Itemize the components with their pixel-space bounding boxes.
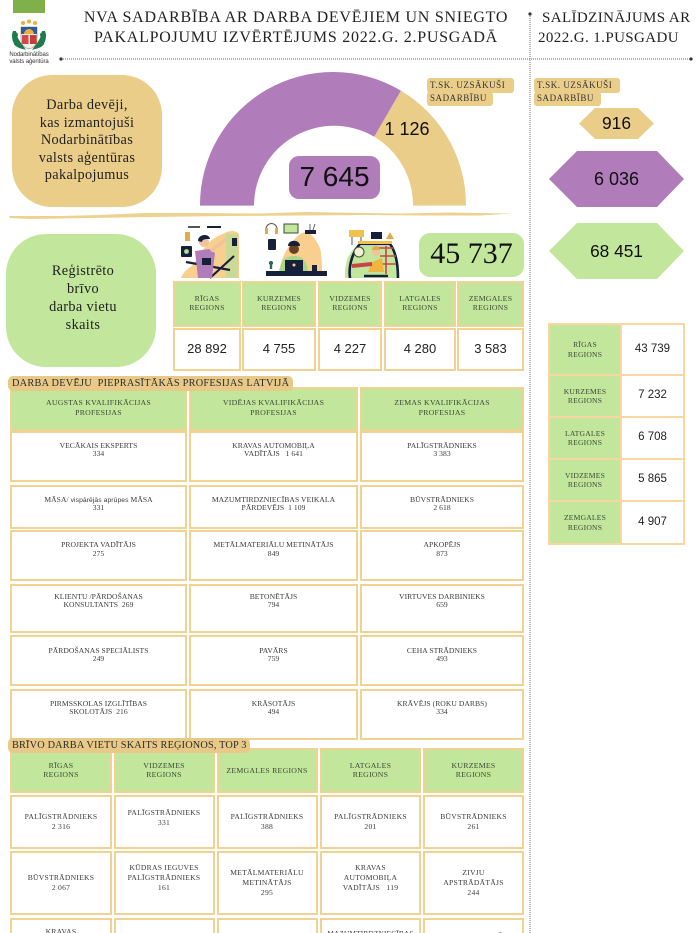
table: most demanded professions: MĀSA/ vispārējās aprūpes MĀSA xyxy=(44,495,153,504)
table: vacancies by region: ZEMGALES xyxy=(469,294,512,302)
table: most demanded professions: VIDĒJAS KVALIFIKĀCIJAS xyxy=(223,398,324,407)
panel: total vacancies 45 737 xyxy=(419,233,524,277)
table: top 3 vacancies by region: METĀLMATERIĀLU xyxy=(230,868,304,877)
table: first half comparison by region: RĪGAS xyxy=(573,340,597,349)
table: first half comparison by region: REGIONS xyxy=(568,480,602,489)
table: top 3 vacancies by region: ZEMGALES REGIONS xyxy=(226,766,308,774)
table: first half comparison by region: 5 865 xyxy=(638,473,667,485)
table: most demanded professions: PROJEKTA VADĪTĀJS xyxy=(61,540,136,549)
table: vacancies by region: REGIONS xyxy=(332,303,368,312)
hexagon 916: 916 xyxy=(602,113,631,133)
table: first half comparison by region: 4 907 xyxy=(638,516,667,528)
table: most demanded professions: PIRMSSKOLAS IZGLĪTĪBAS xyxy=(50,699,147,708)
table: vacancies by region: REGIONS xyxy=(473,303,508,312)
table: vacancies by region: VIDZEMES xyxy=(329,294,371,302)
table: top 3 vacancies by region: PALĪGSTRĀDNIEKS xyxy=(25,812,97,821)
tag: started cooperation: SADARBĪBU xyxy=(430,93,487,103)
table: most demanded professions: 849 xyxy=(268,549,279,558)
table: top 3 vacancies by region: 2 316 xyxy=(52,822,70,831)
table: first half comparison by region: KURZEMES xyxy=(564,387,606,396)
table: vacancies by region: 3 583 xyxy=(474,341,507,356)
logo: Nodarbinātības valsts aģentūra: valsts aģentūra xyxy=(9,59,49,65)
gauge value 1 126: 1 126 xyxy=(384,119,430,139)
table: vacancies by region xyxy=(173,281,524,371)
table: most demanded professions: VADĪTĀJS 1 641 xyxy=(244,449,303,458)
table: most demanded professions: 659 xyxy=(436,600,448,609)
table: most demanded professions: BŪVSTRĀDNIEKS xyxy=(410,495,474,504)
table: most demanded professions: 494 xyxy=(268,707,279,716)
hexagon 68 451 xyxy=(549,223,684,279)
table: top 3 vacancies by region: REGIONS xyxy=(353,770,388,779)
table: most demanded professions: 334 xyxy=(93,449,104,458)
table: most demanded professions: PALĪGSTRĀDNIEKS xyxy=(407,441,477,450)
panel: vacancies label: brīvo xyxy=(67,281,99,297)
table: top 3 vacancies by region: PALĪGSTRĀDNIEKS xyxy=(334,812,407,821)
table: most demanded professions: 249 xyxy=(93,654,104,663)
section heading: top 3 vacancies: BRĪVO DARBA VIETU SKAITS REĢIONOS, TOP 3 xyxy=(12,740,247,751)
section heading: demanded professions: DARBA DEVĒJU PIEPRASĪTĀKĀS PROFESIJAS LATVIJĀ xyxy=(12,378,289,389)
panel: vacancies label xyxy=(6,234,156,367)
table: vacancies by region: RĪGAS xyxy=(195,294,219,302)
table: most demanded professions: AUGSTAS KVALIFIKĀCIJAS xyxy=(46,398,151,407)
icon: technician illustration xyxy=(181,226,239,279)
table: first half comparison by region: VIDZEMES xyxy=(565,471,605,480)
table: vacancies by region: REGIONS xyxy=(189,303,225,312)
table: top 3 vacancies by region: RĪGAS xyxy=(49,760,73,770)
table: top 3 vacancies by region: PALĪGSTRĀDNIEKS xyxy=(231,812,303,821)
panel: employers label: valsts aģentūras xyxy=(39,150,135,166)
panel: employers label: Darba devēji, xyxy=(46,97,128,113)
table: first half comparison by region: REGIONS xyxy=(568,396,602,405)
table: most demanded professions: PROFESIJAS xyxy=(419,408,465,417)
table: most demanded professions: MAZUMTIRDZNIECĪBAS VEIKALA xyxy=(212,495,335,504)
hexagon 68 451: 68 451 xyxy=(590,241,643,261)
table: top 3 vacancies by region: 201 xyxy=(364,822,377,831)
title xyxy=(84,9,508,46)
tag: started cooperation, 1st half: SADARBĪBU xyxy=(537,93,594,103)
table: most demanded professions: 2 618 xyxy=(433,503,451,512)
panel: employers label: Nodarbinātības xyxy=(41,132,133,148)
table: most demanded professions: METĀLMATERIĀLU METINĀTĀJS xyxy=(214,540,334,549)
table: top 3 vacancies by region: METINĀTĀJS xyxy=(242,878,292,887)
table: top 3 vacancies by region: 261 xyxy=(467,822,480,831)
table: top 3 vacancies by region xyxy=(10,748,524,933)
table: most demanded professions: VIRTUVES DARBINIEKS xyxy=(399,592,485,601)
table: top 3 vacancies by region: KŪDRAS IEGUVES xyxy=(129,862,199,872)
table: first half comparison by region: REGIONS xyxy=(568,522,602,532)
table: first half comparison by region: REGIONS xyxy=(568,350,602,358)
table: most demanded professions: PĀRDOŠANAS SPECIĀLISTS xyxy=(48,646,149,655)
table: top 3 vacancies by region: 331 xyxy=(158,818,170,827)
panel: employers label xyxy=(12,75,162,207)
table: top 3 vacancies by region: KURZEMES xyxy=(451,760,496,770)
table: most demanded professions: 493 xyxy=(436,654,448,663)
table: most demanded professions: ZEMAS KVALIFIKĀCIJAS xyxy=(394,398,490,407)
logo: Nodarbinātības valsts aģentūra: Nodarbinātības xyxy=(9,52,49,58)
table: most demanded professions: KRAVAS AUTOMOBIĻA xyxy=(232,441,315,450)
comparison title: 2022.G. 1.PUSGADU xyxy=(538,30,679,46)
table: most demanded professions: VECĀKAIS EKSPERTS xyxy=(60,441,137,450)
green top marker xyxy=(13,0,45,13)
table: top 3 vacancies by region: KRAVAS xyxy=(355,863,386,872)
table: most demanded professions xyxy=(10,387,524,740)
table: first half comparison by region xyxy=(549,324,684,544)
icon: office worker illustration xyxy=(265,223,327,276)
brush divider xyxy=(9,212,512,219)
table: top 3 vacancies by region: BŪVSTRĀDNIEKS xyxy=(28,873,94,882)
table: most demanded professions: KRĀSOTĀJS xyxy=(252,699,295,708)
table: top 3 vacancies by region: LATGALES xyxy=(350,760,391,770)
comparison title xyxy=(538,10,690,46)
tag: started cooperation xyxy=(427,78,514,106)
table: top 3 vacancies by region: PALĪGSTRĀDNIEKS xyxy=(128,872,200,882)
table: first half comparison by region: REGIONS xyxy=(568,438,602,447)
gauge value 7 645 xyxy=(289,156,380,199)
panel: vacancies label: Reģistrēto xyxy=(52,263,114,279)
table: most demanded professions: 3 383 xyxy=(433,449,451,458)
hexagon 6 036 xyxy=(549,151,684,207)
table: top 3 vacancies by region: VADĪTĀJS 119 xyxy=(343,883,398,892)
title: PAKALPOJUMU IZVĒRTĒJUMS 2022.G. 2.PUSGADĀ xyxy=(94,29,498,46)
table: vacancies by region: REGIONS xyxy=(402,303,438,312)
panel: vacancies label: skaits xyxy=(66,317,100,333)
table: vacancies by region: REGIONS xyxy=(261,303,297,312)
table: most demanded professions: 794 xyxy=(268,600,279,609)
logo: Nodarbinātības valsts aģentūra xyxy=(9,20,49,65)
table: top 3 vacancies by region: 388 xyxy=(261,822,273,831)
table: most demanded professions: KLIENTU /PĀRDOŠANAS xyxy=(54,592,143,601)
table: top 3 vacancies by region: 161 xyxy=(158,882,170,892)
table: vacancies by region: 4 227 xyxy=(334,341,366,356)
table: most demanded professions: PROFESIJAS xyxy=(250,408,297,417)
table: most demanded professions: 759 xyxy=(268,654,279,663)
table: most demanded professions: PAVĀRS xyxy=(259,646,288,655)
title: NVA SADARBĪBA AR DARBA DEVĒJIEM UN SNIEGTO xyxy=(84,9,508,26)
table: vacancies by region: 4 280 xyxy=(404,341,436,356)
panel: vacancies label: darba vietu xyxy=(49,299,117,315)
table: most demanded professions: 873 xyxy=(436,549,448,558)
table: vacancies by region: 28 892 xyxy=(187,341,227,356)
table: first half comparison by region: ZEMGALES xyxy=(564,513,606,522)
table: vacancies by region: KURZEMES xyxy=(257,294,301,302)
table: most demanded professions: KONSULTANTS 269 xyxy=(64,600,133,609)
panel: total vacancies 45 737: 45 737 xyxy=(430,237,513,270)
table: most demanded professions: SKOLOTĀJS 216 xyxy=(69,707,128,716)
table: most demanded professions: PĀRDEVĒJS 1 109 xyxy=(242,503,305,512)
table: top 3 vacancies by region: 2 067 xyxy=(52,883,70,892)
table: top 3 vacancies by region: VIDZEMES xyxy=(143,760,185,770)
tag: started cooperation, 1st half xyxy=(534,78,620,106)
table: most demanded professions: 275 xyxy=(93,549,104,558)
table: top 3 vacancies by region: PALĪGSTRĀDNIEKS xyxy=(128,808,200,817)
table: top 3 vacancies by region: BŪVSTRĀDNIEKS xyxy=(440,812,507,821)
table: top 3 vacancies by region: REGIONS xyxy=(456,770,491,779)
table: top 3 vacancies by region: 295 xyxy=(261,888,273,897)
panel: employers label: pakalpojumus xyxy=(45,167,129,183)
table: vacancies by region: LATGALES xyxy=(399,294,441,302)
gauge value 7 645: 7 645 xyxy=(299,161,370,192)
table: first half comparison by region: LATGALES xyxy=(565,429,605,438)
table: first half comparison by region: 6 708 xyxy=(638,431,667,443)
hexagon 6 036: 6 036 xyxy=(594,169,639,189)
table: top 3 vacancies by region: REGIONS xyxy=(43,770,79,779)
table: most demanded professions: CEHA STRĀDNIEKS xyxy=(407,646,477,655)
table: top 3 vacancies by region: 244 xyxy=(467,888,480,897)
tag: started cooperation: T.SK. UZSĀKUŠI xyxy=(430,80,505,90)
table: most demanded professions: KRĀVĒJS (ROKU DARBS) xyxy=(397,699,487,708)
table: most demanded professions: BETONĒTĀJS xyxy=(250,592,297,601)
comparison title: SALĪDZINĀJUMS AR xyxy=(542,10,690,26)
table: top 3 vacancies by region: APSTRĀDĀTĀJS xyxy=(443,878,504,887)
table: most demanded professions: PROFESIJAS xyxy=(75,408,122,417)
table: most demanded professions: 334 xyxy=(436,707,448,716)
table: vacancies by region: 4 755 xyxy=(263,341,295,356)
tag: started cooperation, 1st half: T.SK. UZSĀKUŠI xyxy=(537,80,612,90)
hexagon 916 xyxy=(579,108,654,139)
table: top 3 vacancies by region: REGIONS xyxy=(146,770,182,779)
panel: employers label: kas izmantojuši xyxy=(40,114,134,130)
icon: driver illustration xyxy=(344,230,400,278)
table: first half comparison by region: 43 739 xyxy=(635,343,670,355)
table: most demanded professions: APKOPĒJS xyxy=(423,540,461,549)
table: top 3 vacancies by region: AUTOMOBIĻA xyxy=(344,873,397,882)
table: most demanded professions: 331 xyxy=(93,503,104,512)
table: top 3 vacancies by region: ZIVJU xyxy=(462,868,485,877)
table: first half comparison by region: 7 232 xyxy=(638,389,667,401)
gauge chart xyxy=(200,72,466,206)
